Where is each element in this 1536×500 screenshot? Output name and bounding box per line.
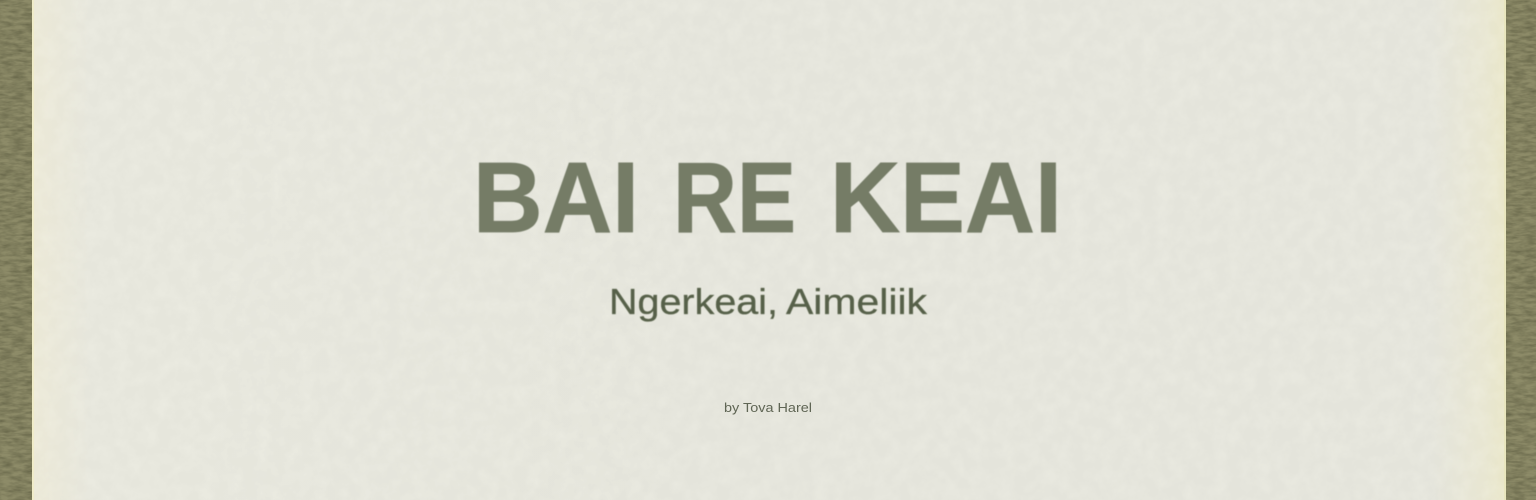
subtitle: Ngerkeai, <box>609 281 778 322</box>
title: KEAI <box>830 142 1062 254</box>
title: BAI <box>473 142 639 254</box>
panel: left linen border <box>0 0 32 500</box>
subtitle: Aimeliik <box>786 281 928 322</box>
title: RE <box>673 142 796 254</box>
panel: right linen border <box>1506 0 1536 500</box>
author credit: by Tova Harel <box>724 400 812 415</box>
subtitle <box>609 281 928 322</box>
title <box>473 142 1062 254</box>
